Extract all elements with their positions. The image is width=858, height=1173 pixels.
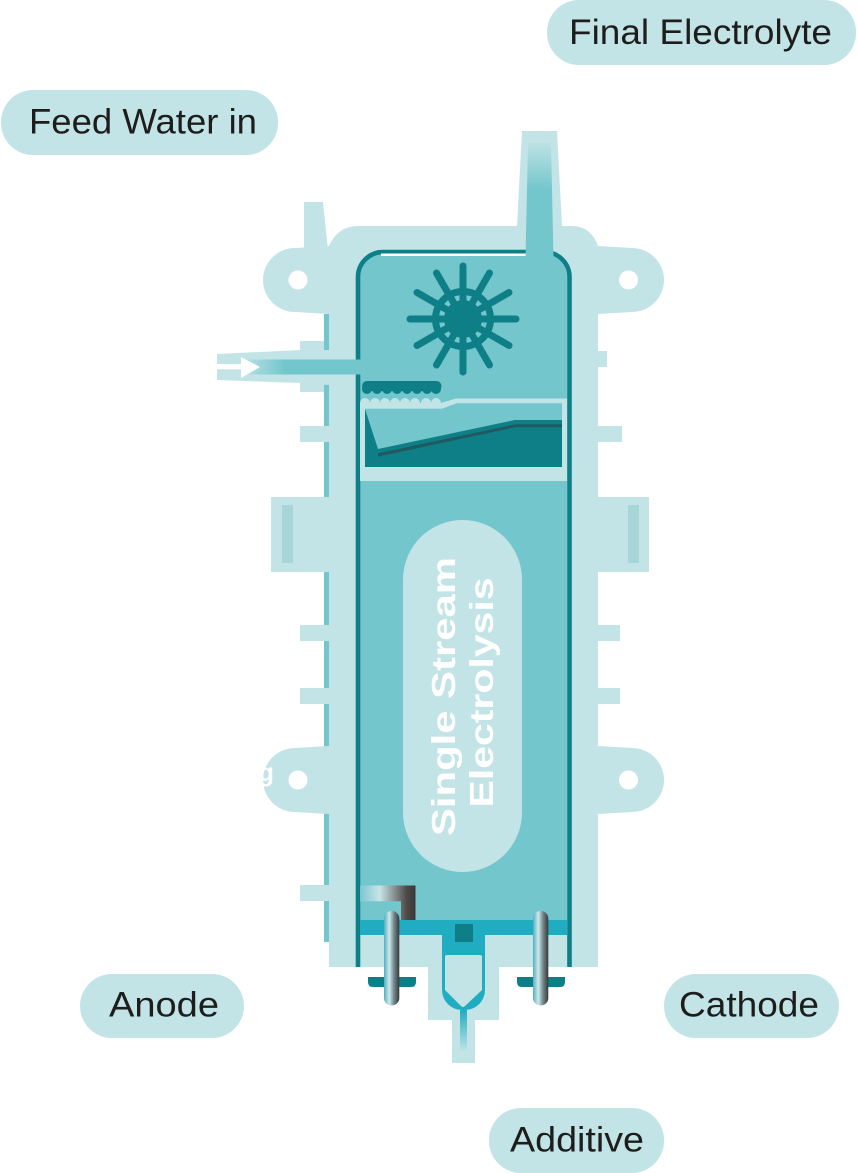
pill: Single Stream Electrolysis: Single Stream — [425, 557, 462, 836]
thin teal outer strip — [324, 314, 329, 942]
chamber liquid — [360, 254, 567, 920]
scalloped bar — [362, 381, 442, 394]
cathode — [517, 911, 565, 1006]
label: Anode — [80, 974, 244, 1038]
outlet pipe — [517, 131, 562, 258]
clipped white text: g — [258, 757, 274, 787]
housing body with lugs — [263, 226, 664, 967]
blue base and funnel — [360, 920, 567, 1052]
electrolyser housing — [263, 202, 664, 967]
bottom funnel housing — [358, 930, 570, 1063]
feed pipe — [217, 341, 362, 393]
label: Additive: Additive — [510, 1120, 644, 1160]
mounting holes — [288, 270, 638, 790]
stirrer — [410, 266, 516, 372]
label: Anode: Anode — [109, 986, 219, 1024]
anode — [368, 911, 416, 1006]
label: Final Electrolyte: Final Electrolyte — [569, 13, 832, 52]
label: Feed Water in — [1, 90, 278, 155]
label: Cathode: Cathode — [679, 986, 819, 1024]
tray — [360, 398, 567, 481]
bottom lugs — [263, 746, 329, 814]
chamber wall — [358, 252, 570, 967]
side clamps — [271, 497, 329, 572]
pill: Single Stream Electrolysis: Electrolysis — [463, 578, 500, 808]
right tabs — [597, 351, 607, 367]
left tabs — [300, 341, 324, 392]
clamp bars — [282, 505, 639, 563]
label: Additive — [489, 1108, 664, 1173]
L-shaped anode connector — [360, 886, 416, 920]
label: Final Electrolyte — [547, 0, 856, 65]
label: Feed Water in: Feed Water in — [29, 102, 257, 142]
label: Cathode — [664, 974, 839, 1038]
pill: Single Stream Electrolysis — [403, 520, 522, 872]
highlight under chamber top — [381, 254, 527, 256]
top nub — [304, 202, 328, 250]
